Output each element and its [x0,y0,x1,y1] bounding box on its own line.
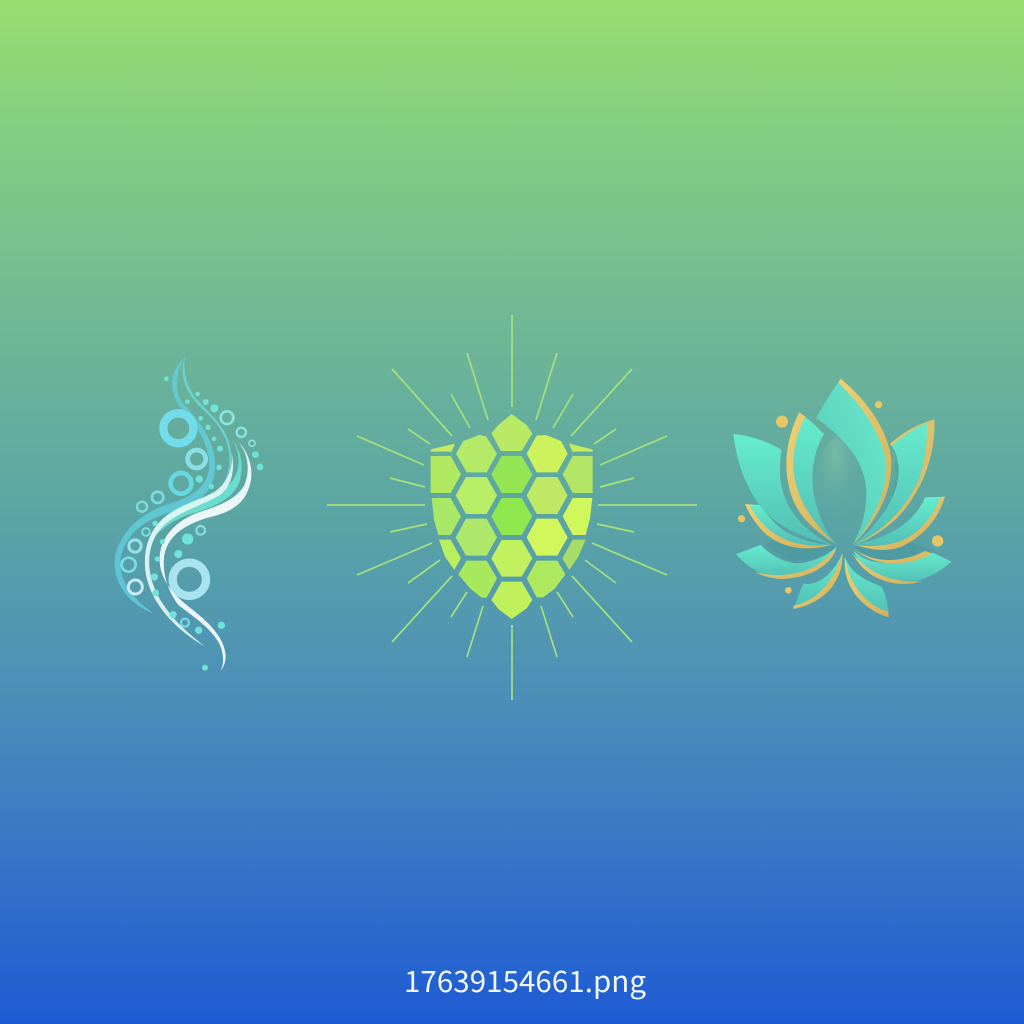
bottom left petal [793,553,842,608]
left low petal [745,504,832,546]
right low gold edge [854,497,945,550]
far left petal [733,434,832,545]
top center petal [816,380,891,545]
right middle gold edge [853,553,922,584]
white inner ribbon [145,452,233,647]
left bottom gold edge [755,547,837,579]
right petal gold edge [853,419,934,545]
bottom right petal [845,557,889,617]
top petal gold edge [838,379,891,545]
white outer ribbon [160,442,251,671]
right middle petal [853,550,952,584]
gold dots [738,401,943,594]
filename caption: 17639154661.png [404,959,646,1001]
thin upper strand [183,356,231,487]
far right petal [853,419,934,545]
right low petal [854,497,945,548]
icon: lotus flower [733,379,952,617]
left inner petal [788,413,836,544]
icon: hexagon turtle-shell shield [431,414,593,619]
petal shadows [765,460,932,562]
left bottom petal [736,545,837,578]
left petal gold edge [786,412,836,544]
outer blue swoosh [115,357,215,613]
center drop [813,433,867,543]
bottom left gold edge [793,553,842,609]
icon: sunburst rays [327,315,697,700]
left low gold edge [745,504,832,548]
right middle gold band [853,547,932,563]
bottom right gold edge [845,557,889,617]
bubbles [122,411,255,627]
teal swoosh [145,437,242,553]
icon: wave swirl with bubbles [115,356,263,671]
